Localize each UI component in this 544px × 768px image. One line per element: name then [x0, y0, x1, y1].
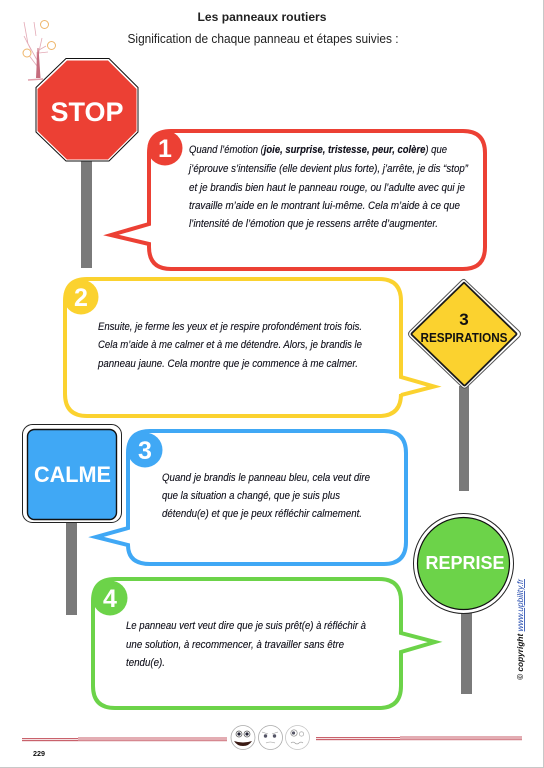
- page number: 229: [33, 751, 45, 758]
- text block: step 1: l’intensité de l’émotion que je ressens arrête d’augmenter.: [189, 218, 438, 230]
- sign post: stop: [81, 160, 92, 268]
- text block: step 1: [187, 144, 469, 230]
- sign post: reprise: [461, 612, 472, 694]
- panel: step 1 bubble: [111, 130, 485, 269]
- text block: step 4: tendu(e).: [126, 657, 165, 669]
- title: Les panneaux routiers: [198, 11, 326, 24]
- text block: step 1: et je brandis bien haut le panneau rouge, ou l’adulte avec qui je: [189, 182, 465, 194]
- text block: step 4: [126, 620, 366, 669]
- icon: number 2: 2: [74, 284, 88, 312]
- text block: step 2: [97, 321, 362, 370]
- footer rule: left: [22, 737, 227, 741]
- text block: step 3: détendu(e) et que je peux réfléchir calmement.: [162, 508, 362, 520]
- text block: step 2: Cela m’aide à me calmer et à me détendre. Alors, je brandis le: [98, 339, 362, 351]
- sign: CALME: [22, 424, 122, 522]
- icon: number 2: [64, 280, 98, 314]
- icon: number 3: 3: [138, 437, 152, 465]
- text block: step 3: [162, 472, 370, 520]
- text block: step 1: Quand l’émotion (joie, surprise, tristesse, peur, colère) que: [189, 144, 447, 156]
- icon: number 1: [148, 130, 182, 166]
- text block: step 4: une solution, à recommencer, à travailler sans être: [126, 639, 344, 651]
- sign: 3 RESPIRATIONS: [408, 279, 520, 388]
- sign: STOP: STOP: [50, 97, 124, 127]
- icon: number 4: 4: [103, 585, 117, 613]
- icon: sad face: [258, 726, 282, 750]
- copyright vertical text: © copyright www.upbility.fr: [515, 578, 525, 680]
- text block: step 3: que la situation a changé, que je suis plus: [162, 490, 340, 502]
- text block: step 3: Quand je brandis le panneau bleu, cela veut dire: [162, 472, 370, 484]
- text block: step 2: Ensuite, je ferme les yeux et je respire profondément trois fois.: [98, 321, 362, 333]
- sign: 3 RESPIRATIONS: RESPIRATIONS: [420, 331, 508, 345]
- icon: number 4: [92, 580, 128, 616]
- text block: step 2: panneau jaune. Cela montre que je commence à me calmer.: [97, 358, 358, 370]
- panel: step 3 bubble: [96, 431, 406, 564]
- sign post: calme: [66, 522, 77, 615]
- icon: number 1: 1: [158, 135, 172, 163]
- footer rule: right: [316, 736, 522, 740]
- sign: CALME: CALME: [34, 462, 111, 487]
- text block: step 1: travaille m’aide en le montrant lui-même. Cela m’aide à ce que: [189, 200, 460, 212]
- icon: decorative tree with faces: [23, 20, 56, 80]
- sign: STOP: [36, 58, 138, 161]
- subtitle: Signification de chaque panneau et étapes suivies :: [128, 31, 398, 46]
- panel: step 4 bubble: [92, 579, 435, 708]
- sign: 3 RESPIRATIONS: 3: [459, 310, 469, 329]
- icon: happy face: [231, 726, 255, 750]
- text block: step 4: Le panneau vert veut dire que je suis prêt(e) à réfléchir à: [126, 620, 366, 632]
- sign: REPRISE: [414, 514, 514, 614]
- panel: step 2 bubble: [64, 279, 434, 416]
- icon: number 3: [128, 432, 162, 468]
- sign: REPRISE: REPRISE: [426, 553, 504, 573]
- text block: step 1: j’éprouve s’intensifie (elle devient plus forte), j’arrête, je dis “stop”: [187, 163, 469, 175]
- sign post: respirations: [459, 386, 469, 491]
- icon: worried face: [286, 726, 310, 750]
